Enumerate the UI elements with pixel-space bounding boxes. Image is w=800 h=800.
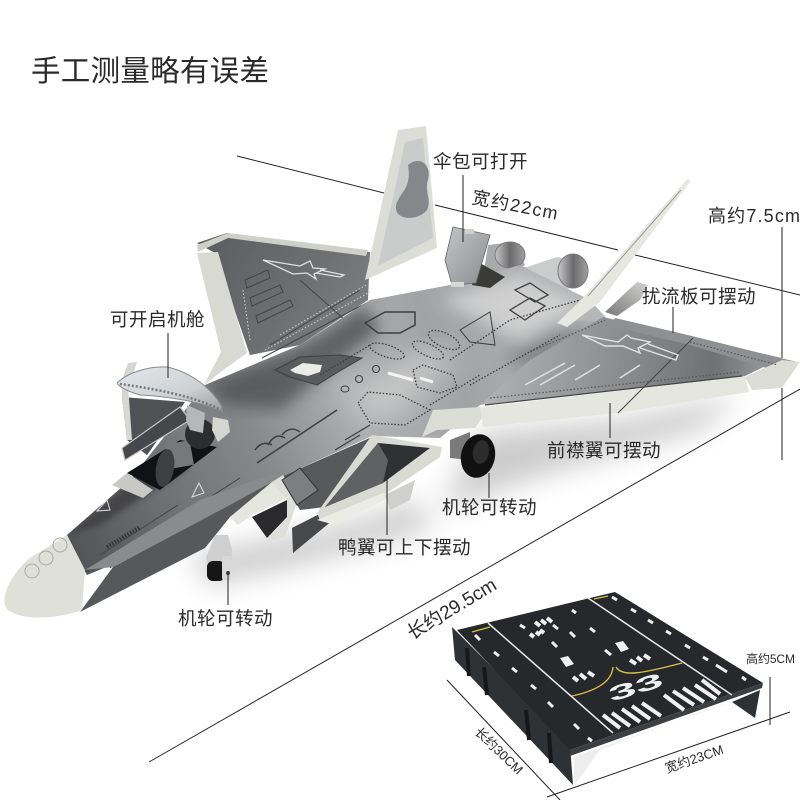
runway rectangles: [560, 641, 629, 667]
near air intake: [230, 437, 378, 541]
label: nose wheel rotates: [178, 572, 273, 629]
runway dashes: [475, 597, 746, 741]
label: height 7.5cm: 高约7.5cm: [708, 206, 800, 226]
label: main wheel rotates: [442, 473, 537, 518]
runway yellow lines: [472, 596, 682, 696]
runway number: 33: [606, 668, 666, 707]
runway inner shadow: [573, 702, 732, 785]
canard wing: [292, 435, 442, 553]
far wing star insignia: [263, 260, 344, 279]
runway dimension lines: [447, 677, 790, 800]
label: leading-edge flap: 前襟翼可摆动: [547, 440, 661, 461]
runway front lip: [570, 683, 763, 756]
runway edge lines: [488, 598, 732, 733]
wall ribs: [467, 648, 551, 763]
dimension line: length 29.5cm: [149, 389, 800, 762]
label: main wheel rotates: 机轮可转动: [442, 497, 537, 518]
open canopy: [117, 362, 222, 460]
label: leading-edge flap: [547, 403, 661, 461]
label: opening cockpit: 可开启机舱: [110, 309, 205, 330]
title: 手工测量略有误差: [31, 55, 269, 88]
label: parachute pack: [433, 151, 528, 242]
fuselage body: [67, 265, 610, 575]
label: opening cockpit: [110, 309, 205, 378]
nose cone: [4, 535, 85, 618]
main landing gear: [450, 431, 499, 481]
runway base: [452, 592, 763, 785]
cockpit: [112, 417, 230, 498]
far wing: [197, 233, 372, 385]
label: base height 5CM: 高约5CM: [746, 651, 795, 666]
vertical tail left: [365, 126, 437, 280]
runway side wall: [452, 627, 573, 785]
right wing star insignia: [582, 335, 678, 360]
engine nozzles: [483, 242, 588, 320]
aircraft model: [4, 126, 800, 618]
body shading: [67, 275, 600, 535]
vertical tail right: [557, 178, 690, 327]
label: base width 23CM: 宽约23CM: [663, 742, 725, 776]
runway threshold bars: [530, 618, 720, 728]
runway top surface: [457, 592, 763, 750]
ground shadow: [190, 395, 740, 585]
runway right side wall: [732, 690, 760, 718]
label: parachute pack: 伞包可打开: [433, 151, 528, 172]
label: spoiler: [642, 286, 756, 333]
right strake: [422, 407, 482, 437]
label: width 22cm: 宽约22cm: [470, 187, 559, 224]
nose lower fuselage: [80, 470, 283, 612]
dimension line: width 22cm: [237, 156, 800, 295]
nose landing gear: [206, 535, 232, 581]
label: nose wheel rotates: 机轮可转动: [178, 608, 273, 629]
label: length 29.5cm: 长约29.5cm: [403, 574, 501, 644]
label: base length 30CM: 长约30CM: [472, 724, 526, 777]
label: spoiler: 扰流板可摆动: [642, 286, 756, 307]
fuselage panel details: [85, 283, 580, 572]
label: canard: [338, 477, 471, 558]
right wing: [480, 317, 800, 427]
horizontal stabiliser: [605, 282, 648, 316]
parachute pack lid: [445, 227, 505, 288]
label: canard: 鸭翼可上下摆动: [338, 537, 471, 558]
